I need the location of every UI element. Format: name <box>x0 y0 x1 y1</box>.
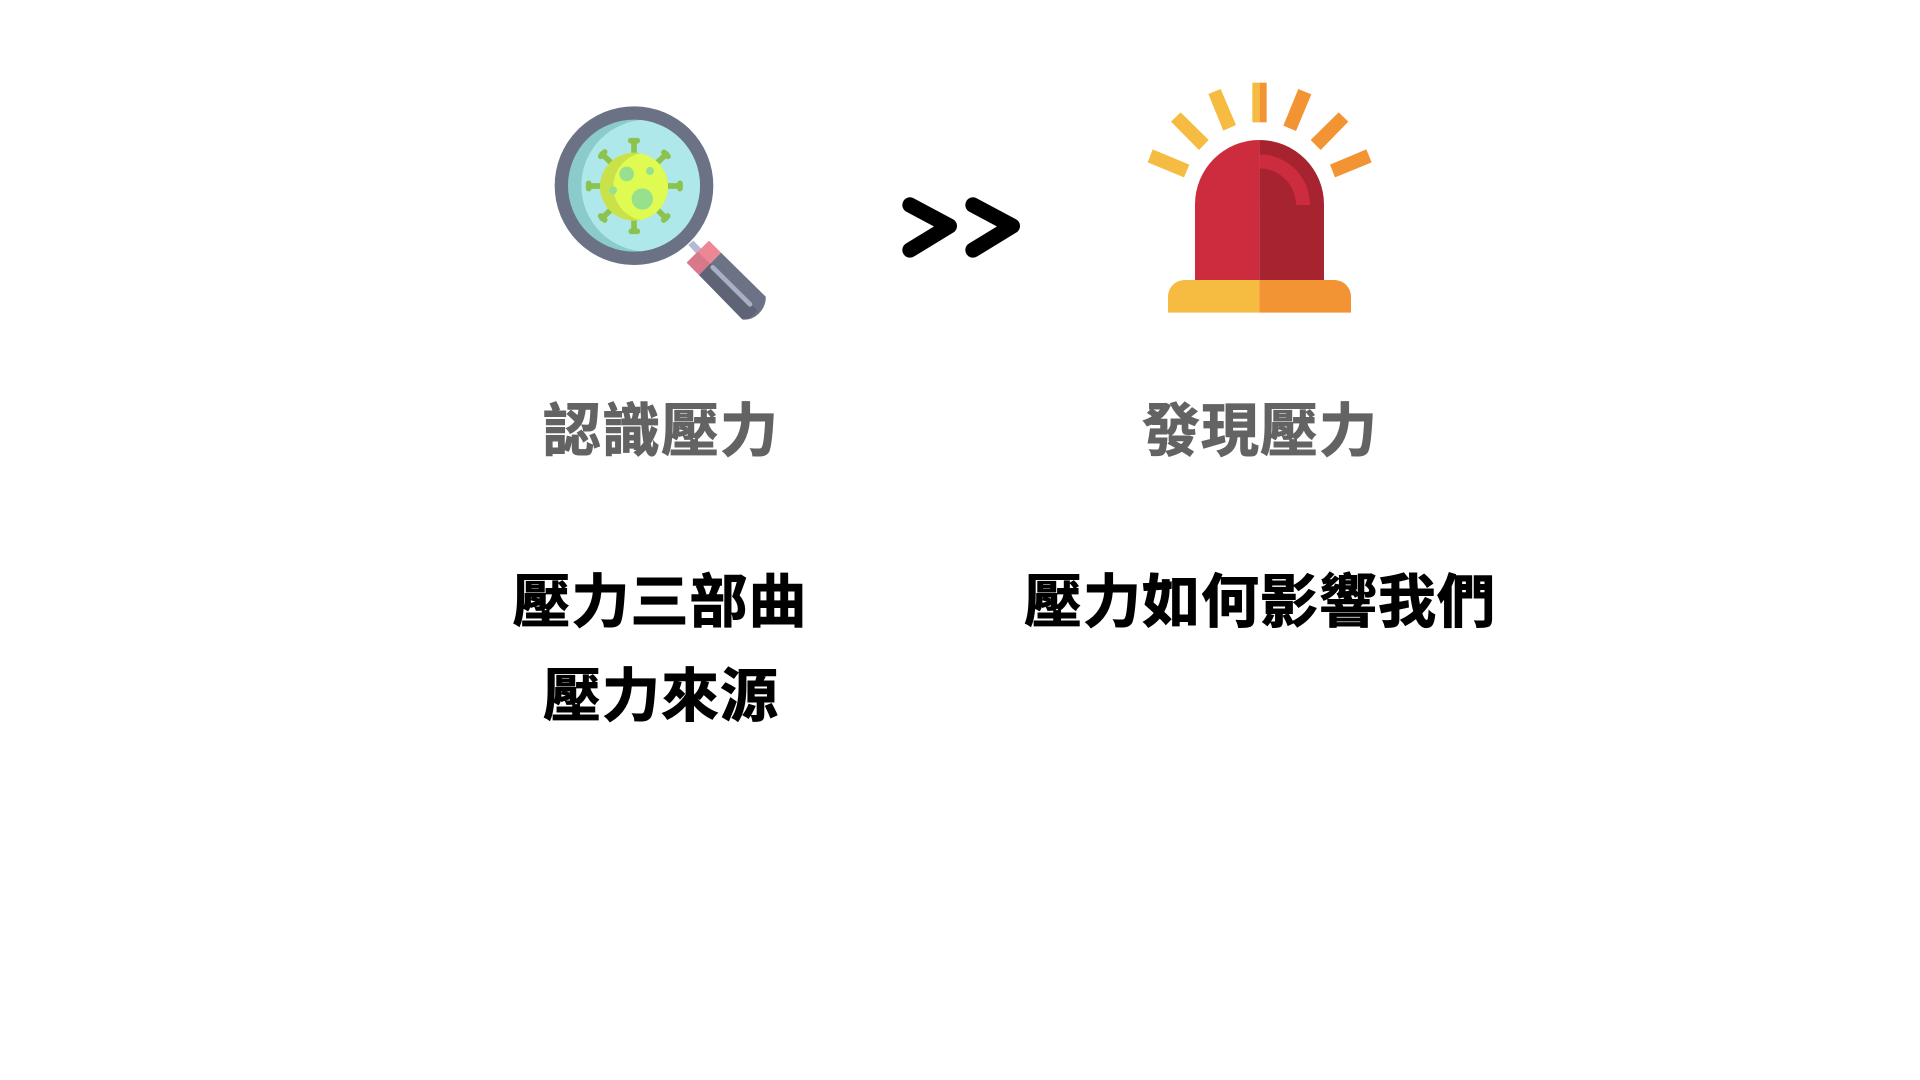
heading: 認識壓力: 認識壓力 <box>543 399 779 464</box>
icon: red siren <box>1148 82 1372 313</box>
text: 壓力三部曲: 壓力三部曲 <box>512 570 808 635</box>
icon: magnifying glass with virus <box>554 106 766 320</box>
arrow: double chevron <box>902 197 1020 258</box>
heading: 發現壓力: 發現壓力 <box>1142 399 1378 464</box>
text: 壓力來源: 壓力來源 <box>543 664 779 729</box>
text: 壓力如何影響我們: 壓力如何影響我們 <box>1024 570 1496 635</box>
